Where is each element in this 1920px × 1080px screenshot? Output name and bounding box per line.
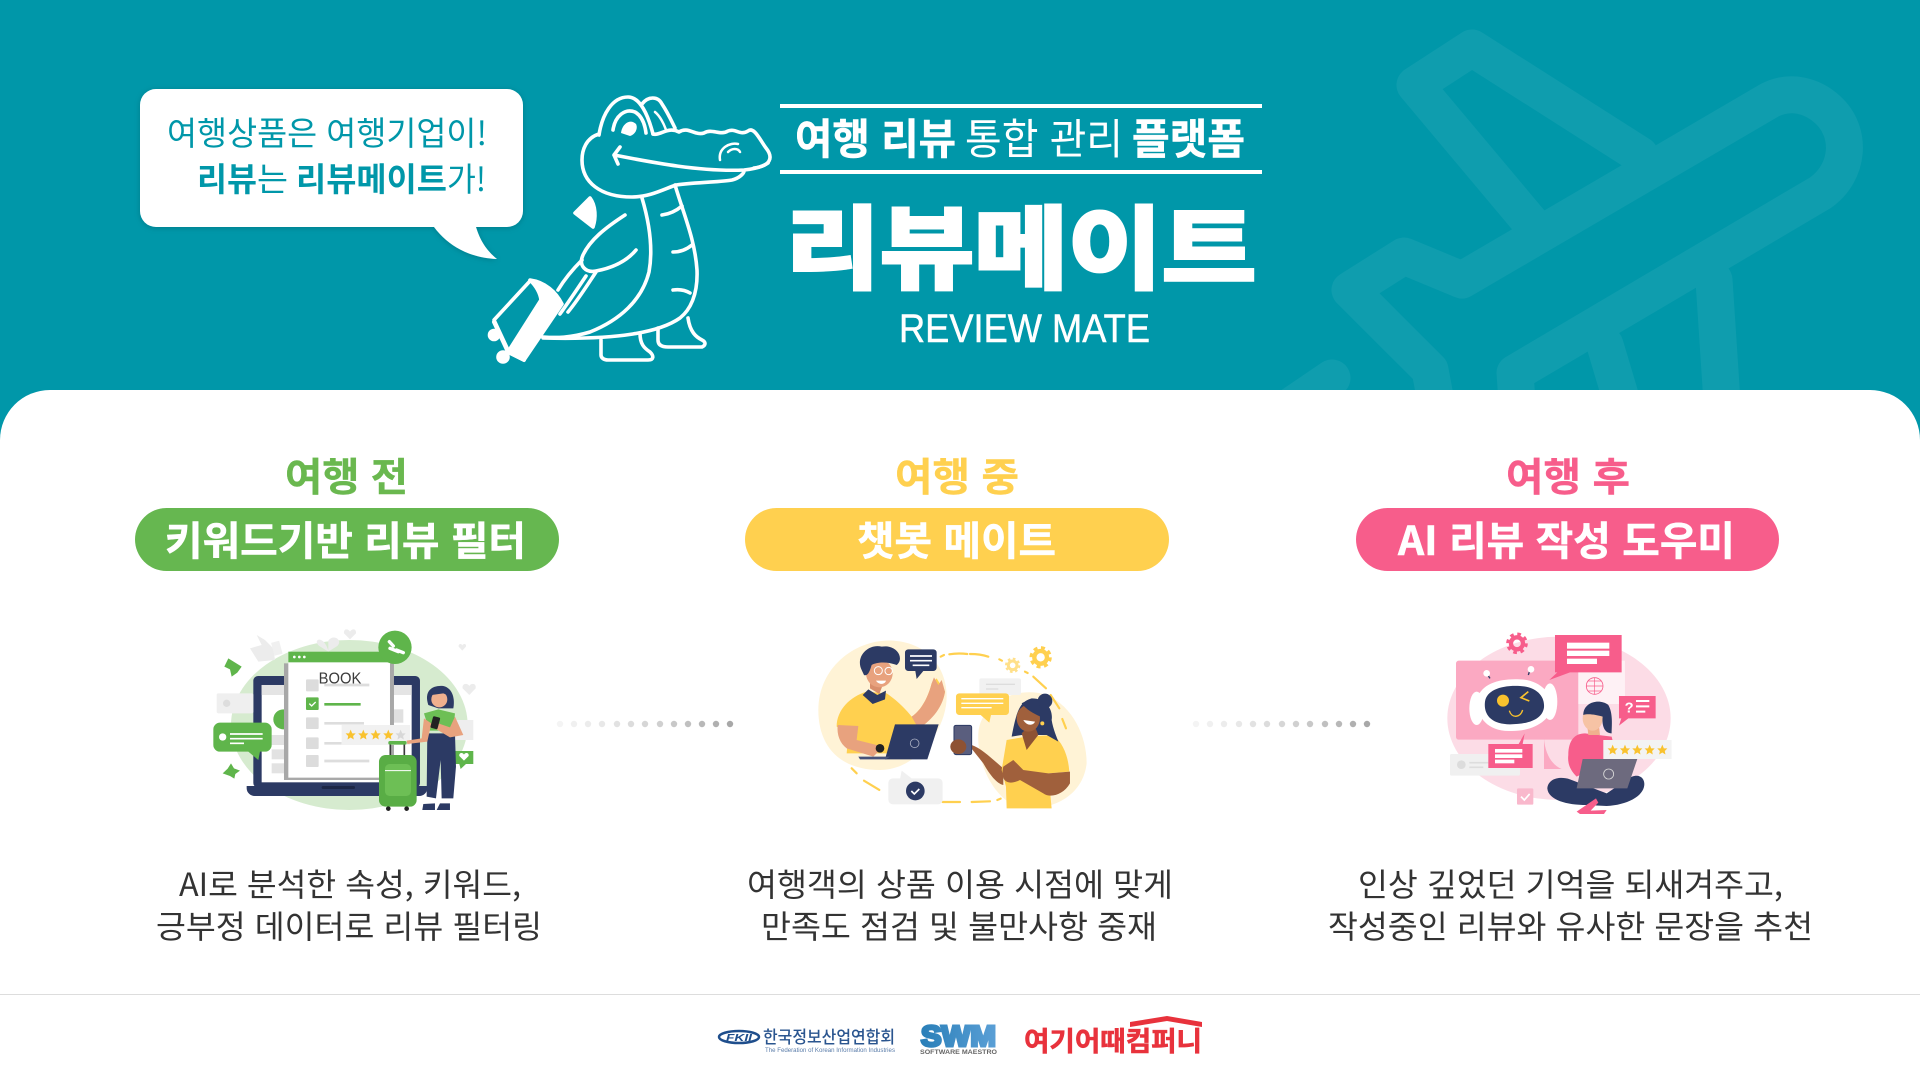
- illustration: AI robot writing helper: [1447, 634, 1672, 814]
- background airplane icon: [1285, 48, 1844, 410]
- illustration: book review filter: BOOK: [319, 671, 362, 688]
- logo: Yeogi Eottae Company: 여기어때컴퍼니: [1024, 1020, 1202, 1059]
- description: column 3: 작성중인 리뷰와 유사한 문장을 추천: [1328, 902, 1813, 948]
- logo: Software Maestro: SWM: [921, 1021, 996, 1053]
- description: column 1: AI로 분석한 속성, 키워드,: [179, 860, 521, 906]
- main title: 리뷰메이트: [786, 177, 1256, 307]
- subtitle with rules: 여행 리뷰: [795, 106, 956, 167]
- column 1 heading: 여행 전: [285, 447, 408, 503]
- bubble line 2: [197, 153, 486, 201]
- logo: FKII: FKII: [726, 1033, 752, 1044]
- bubble line 1: 여행상품은 여행기업이!: [167, 107, 487, 155]
- description: column 1: [156, 860, 542, 948]
- icon: crocodile mascot with suitcase: [490, 97, 770, 362]
- bubble line 2: 는: [257, 153, 288, 201]
- speech bubble: [140, 89, 523, 259]
- bubble line 2: 가!: [447, 153, 486, 201]
- description: column 3: 인상 깊었던 기억을 되새겨주고,: [1358, 860, 1783, 906]
- pill: chatbot mate: 챗봇 메이트: [857, 509, 1056, 567]
- white content panel: [0, 390, 1920, 1080]
- logo: FKII: 한국정보산업연합회: [763, 1023, 895, 1048]
- pill: keyword review filter: 키워드기반 리뷰 필터: [165, 509, 526, 567]
- bubble line 2: 리뷰: [197, 153, 257, 201]
- logo: Software Maestro: SOFTWARE MAESTRO: [920, 1049, 997, 1056]
- illustration: book review filter: [213, 629, 476, 811]
- description: column 2: [747, 860, 1173, 948]
- dotted connector 1: [557, 721, 733, 727]
- column 1 heading: [135, 447, 559, 571]
- column 2 heading: [745, 447, 1169, 571]
- subtitle with rules: 통합 관리: [965, 106, 1123, 167]
- bubble line 2: 리뷰메이트: [296, 153, 447, 201]
- logo: FKII: The Federation of Korean Information Industries: [765, 1047, 896, 1054]
- column 3 heading: 여행 후: [1506, 447, 1630, 503]
- pill: chatbot mate: [745, 508, 1169, 571]
- description: column 2: 여행객의 상품 이용 시점에 맞게: [747, 860, 1173, 906]
- illustration: AI robot writing helper: ?: [1625, 701, 1634, 717]
- english title: REVIEW MATE: [899, 307, 1150, 351]
- pill: AI review writing helper: AI 리뷰 작성 도우미: [1397, 509, 1735, 567]
- subtitle with rules: 플랫폼: [1132, 106, 1245, 167]
- subtitle with rules: [780, 104, 1262, 174]
- header background: [0, 0, 1920, 440]
- logo: FKII: [719, 1023, 896, 1054]
- column 3 heading: [1356, 447, 1779, 571]
- dotted connector 2: [1193, 721, 1370, 727]
- column 2 heading: 여행 중: [895, 447, 1019, 503]
- description: column 2: 만족도 점검 및 불만사항 중재: [761, 902, 1157, 948]
- description: column 3: [1328, 860, 1813, 948]
- illustration: chatbot conversation: [818, 641, 1087, 808]
- description: column 1: 긍부정 데이터로 리뷰 필터링: [156, 902, 542, 948]
